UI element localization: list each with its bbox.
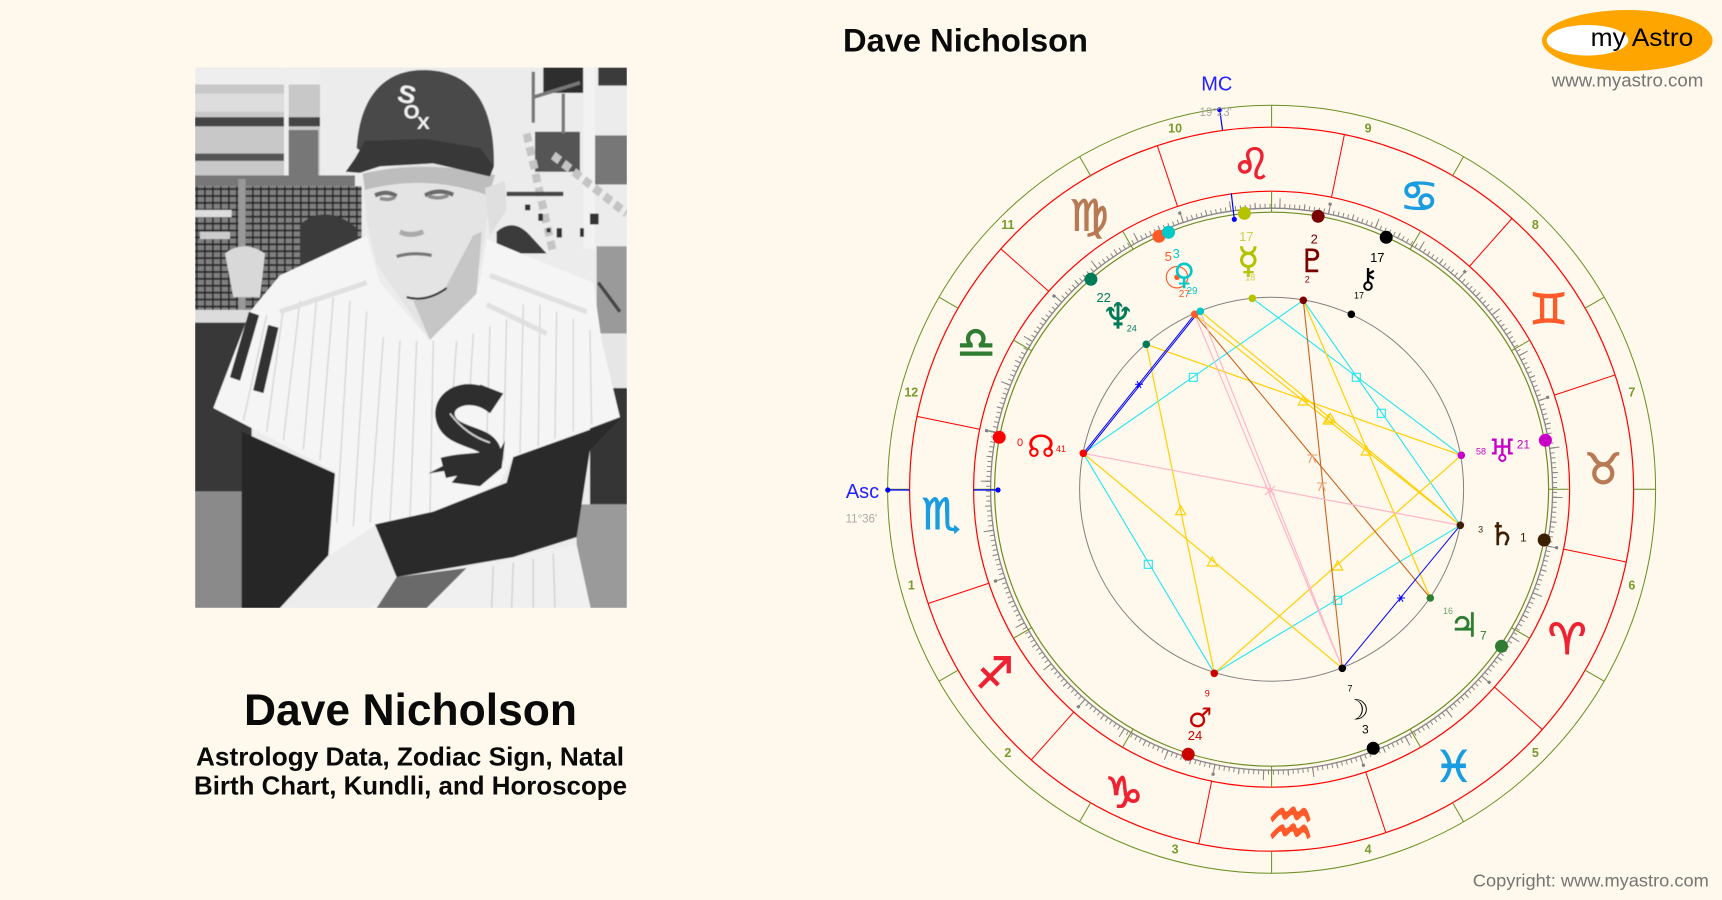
zodiac sign glyphs: ♐︎	[975, 649, 1014, 699]
label: Asc: Asc	[846, 481, 879, 503]
planet: Chiron	[1348, 231, 1393, 318]
pants	[576, 544, 591, 608]
planet: Jupiter: 16	[1443, 606, 1453, 616]
right sleeve	[375, 419, 620, 577]
planet: Moon: ☽	[1344, 694, 1369, 726]
planet: Moon	[1338, 664, 1380, 755]
cap	[357, 70, 494, 166]
planet: Mercury: 18	[1245, 273, 1255, 283]
house numbers: 5	[1532, 746, 1539, 760]
planet: Venus	[1162, 226, 1204, 315]
planet: Saturn: ♄	[1488, 517, 1516, 553]
sign boundary markers	[985, 202, 1558, 776]
aspect lines: trines	[1083, 300, 1461, 673]
planet: Pluto: 2	[1305, 274, 1310, 284]
aspect lines: squares	[1083, 298, 1461, 673]
zodiac sign glyphs	[922, 140, 1622, 868]
label: Asc degree: 11°36'	[846, 514, 877, 526]
hand	[280, 606, 282, 608]
zodiac sign glyphs: ♈︎	[1548, 615, 1586, 665]
planet: Uranus: ♅	[1488, 432, 1517, 470]
planet: Jupiter: ♃	[1450, 606, 1479, 644]
zodiac sign glyphs: ♊︎	[1529, 285, 1568, 335]
zodiac sign glyphs: ♉︎	[1584, 445, 1622, 495]
house numbers: 1	[908, 578, 915, 592]
planet: Mercury: ☿	[1237, 241, 1259, 282]
planet: Sun	[1152, 230, 1198, 318]
planet: Chiron: 17	[1370, 250, 1385, 265]
planet: North Node: ☊	[1027, 429, 1055, 465]
copyright: Copyright: www.myastro.com	[1473, 871, 1709, 891]
aspect lines: sextiles	[1083, 314, 1460, 668]
face	[384, 164, 442, 300]
planet: Mars: 24	[1188, 728, 1202, 743]
planet: Jupiter: 7	[1480, 629, 1487, 643]
sleeve number 11	[235, 314, 273, 392]
planet: Neptune: 24	[1127, 324, 1137, 334]
house numbers: 8	[1532, 218, 1539, 232]
photo: Dave Nicholson portrait: X	[417, 112, 430, 133]
planet: Neptune	[1084, 273, 1150, 348]
zodiac sign glyphs: ♏︎	[922, 490, 960, 540]
aspect lines: oppositions	[1083, 311, 1460, 668]
inner red ring	[974, 191, 1570, 787]
zodiac sign glyphs: ♎︎	[957, 318, 995, 368]
chart title: Dave Nicholson	[843, 23, 1088, 59]
planet: Pluto: ♇	[1298, 242, 1327, 280]
house numbers: 9	[1365, 122, 1372, 136]
zodiac sign glyphs: ♌︎	[1232, 140, 1271, 190]
planet: Neptune: ♆	[1102, 296, 1134, 338]
planet: Neptune: 22	[1096, 290, 1111, 305]
planet: Moon: 7	[1347, 683, 1353, 693]
heading: name: Dave Nicholson	[244, 686, 577, 735]
logo: myAstro: my Astro	[1591, 24, 1693, 52]
subheading line 2: Birth Chart, Kundli, and Horoscope	[194, 773, 627, 801]
planet: Venus: 3	[1173, 246, 1180, 261]
left sleeve	[242, 432, 335, 608]
planet: Chiron: ⚷	[1358, 262, 1378, 295]
planet: North Node	[993, 429, 1087, 465]
ascendant marker	[885, 487, 1001, 493]
planet: Pluto	[1298, 210, 1327, 304]
planet: Uranus: 58	[1476, 446, 1486, 456]
zodiac sign glyphs: ♓︎	[1434, 743, 1473, 793]
photo: Dave Nicholson portrait	[195, 67, 627, 608]
house numbers: 10	[1168, 122, 1182, 136]
outer olive ring	[888, 105, 1656, 873]
degree ticks	[934, 152, 1609, 827]
sign division spokes	[917, 135, 1626, 844]
planet: North Node: 0	[1017, 437, 1023, 449]
house numbers: 6	[1628, 578, 1635, 592]
zodiac sign glyphs: ♒︎	[1266, 782, 1315, 868]
house numbers: 3	[1172, 842, 1179, 856]
planet: Uranus	[1458, 432, 1552, 470]
planet: Saturn: 1	[1520, 531, 1527, 545]
inner olive ring	[995, 212, 1549, 766]
label: MC: MC	[1201, 74, 1232, 96]
house cusp ticks	[888, 105, 1656, 873]
planet: Mars: 9	[1205, 689, 1210, 699]
planet: Mercury	[1237, 207, 1259, 302]
zodiac sign glyphs: ♑︎	[1105, 768, 1143, 818]
planet: Venus: ♀	[1173, 258, 1195, 292]
planet: Mars: ♂	[1188, 703, 1212, 734]
house numbers: 7	[1628, 386, 1635, 400]
midheaven marker	[1217, 107, 1237, 222]
house numbers: 12	[904, 386, 918, 400]
planet: Saturn	[1456, 517, 1551, 553]
planet: Uranus: 21	[1517, 438, 1530, 452]
planet: Jupiter	[1426, 594, 1508, 653]
planet: Sun: 27	[1179, 289, 1190, 300]
subheading line 1: Astrology Data, Zodiac Sign, Natal	[196, 743, 624, 771]
planet: Saturn: 3	[1478, 524, 1483, 534]
planet: Sun: 5	[1165, 249, 1172, 264]
logo url: www.myastro.com	[1551, 71, 1703, 91]
planet: North Node: 41	[1056, 444, 1066, 454]
planet: Venus: 29	[1186, 286, 1198, 297]
house numbers	[904, 122, 1635, 856]
inner aspect circle	[1080, 297, 1464, 681]
outer red ring	[910, 127, 1634, 851]
planet: Mercury: 17	[1239, 229, 1254, 244]
zodiac sign glyphs: ♍︎	[1070, 192, 1108, 242]
planet: Sun: ☉	[1163, 260, 1191, 296]
jersey S logo	[443, 395, 495, 468]
cap lettering: S	[395, 79, 419, 110]
planet: Chiron: 17	[1354, 291, 1364, 301]
planet: Moon: 3	[1362, 722, 1369, 736]
house numbers: 11	[1001, 218, 1014, 232]
house numbers: 2	[1004, 746, 1011, 760]
planet: Pluto: 2	[1311, 232, 1318, 246]
jersey	[213, 235, 620, 555]
planet: Mars	[1182, 670, 1218, 761]
degree scale arc	[991, 208, 1553, 770]
label: MC degree: 19°23'	[1200, 107, 1232, 119]
zodiac sign glyphs: ♋︎	[1400, 172, 1439, 222]
natal chart wheel	[846, 74, 1656, 873]
photo: Dave Nicholson portrait: O	[404, 102, 420, 123]
logo: myAstro	[1542, 10, 1713, 71]
house numbers: 4	[1365, 842, 1372, 856]
aspect lines: quincunx	[1195, 300, 1430, 668]
